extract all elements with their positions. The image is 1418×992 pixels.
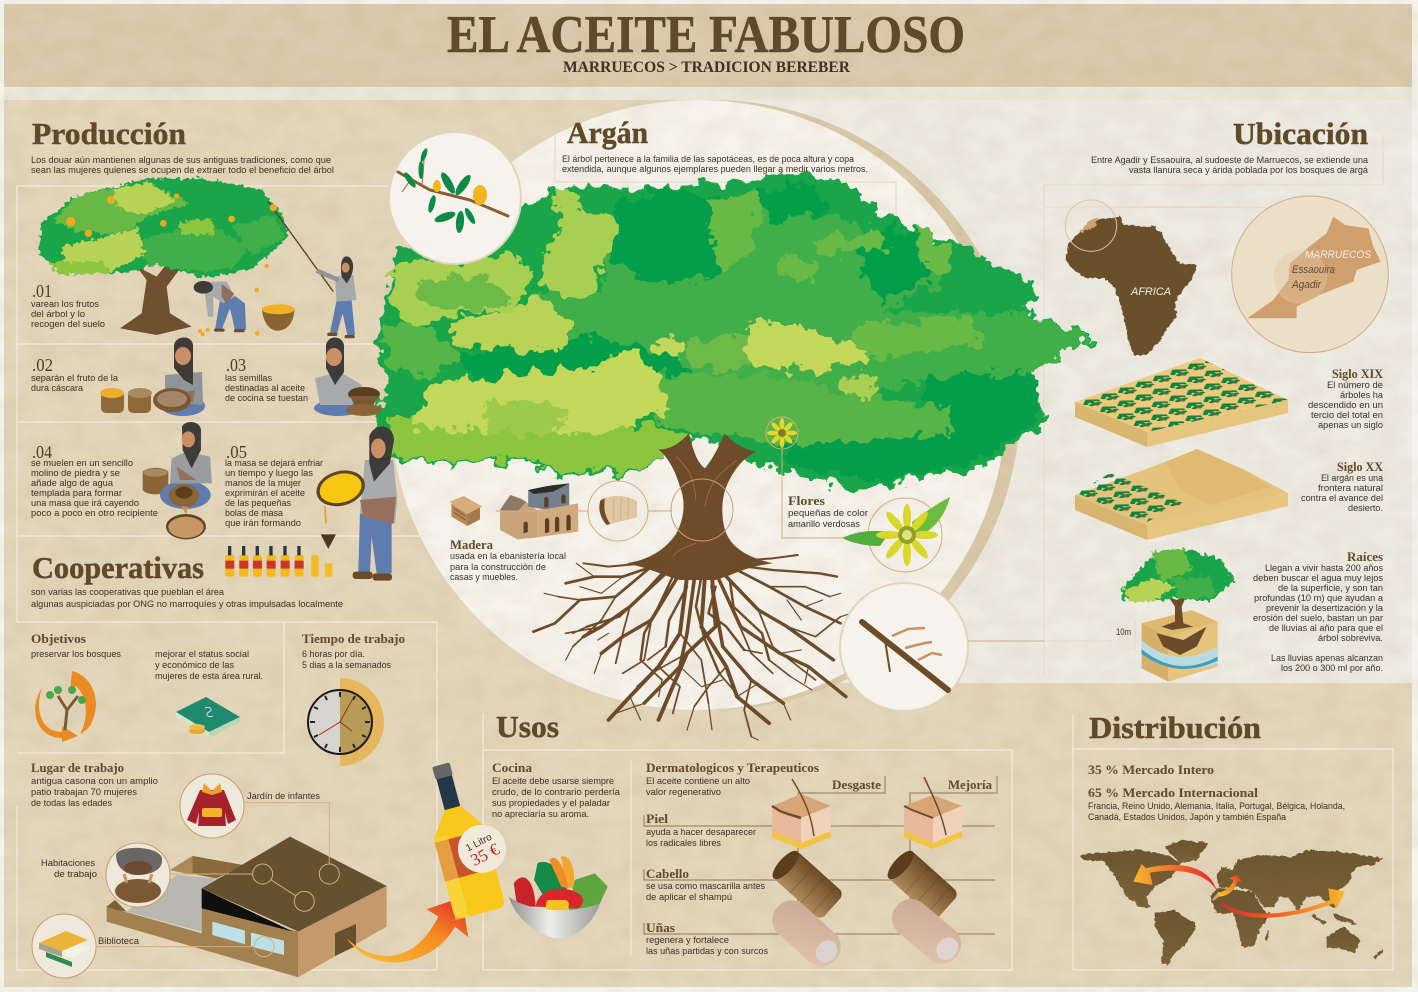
text: Siglo XX: frontera natural bbox=[1318, 483, 1383, 494]
icon: books in circle bbox=[32, 914, 96, 978]
panel: Ubicación bbox=[1045, 116, 1388, 682]
step 01 text: recogen del suelo bbox=[31, 319, 105, 330]
step 04 text: .04 bbox=[32, 442, 52, 462]
heading: Usos bbox=[496, 709, 559, 744]
row: Uñas: Uñas bbox=[646, 920, 675, 935]
label bbox=[450, 537, 566, 583]
text: Siglo XX: Siglo XX bbox=[1337, 459, 1384, 474]
title block bbox=[447, 6, 965, 76]
step 05 text: exprimirán el aceite bbox=[225, 488, 305, 499]
step 05 text: que irán formando bbox=[225, 518, 301, 529]
step 03 text: .03 bbox=[226, 355, 246, 375]
label: Habitaciones de trabajo: de trabajo bbox=[54, 869, 97, 880]
illustration: cooperative building bbox=[97, 803, 387, 977]
text: Siglo XIX: Siglo XIX bbox=[1332, 366, 1384, 381]
step 03 text: destinadas al aceite bbox=[225, 383, 305, 394]
label: casas y muebles. bbox=[450, 572, 518, 583]
subsection: dermatological uses text: Desgaste bbox=[832, 777, 881, 792]
callout: wood uses bbox=[450, 479, 733, 583]
step 03 text bbox=[225, 355, 308, 404]
subsection: Cocina text: sus propiedades y el paladar bbox=[492, 798, 611, 809]
map: world with export arrows bbox=[1080, 840, 1383, 965]
heading: Objetivos bbox=[31, 631, 86, 646]
map: Morocco bbox=[1232, 196, 1388, 353]
row: Cabello: de aplicar el shampú bbox=[646, 892, 732, 903]
step 03 text: las semillas bbox=[225, 373, 272, 384]
step 04 text: se muelen en un sencillo bbox=[31, 458, 133, 469]
subsection: Cocina text: crudo, de lo contrario perdería bbox=[492, 787, 621, 798]
text: mejorar el status social bbox=[155, 649, 249, 660]
illustration: harvest tree bbox=[120, 259, 192, 335]
heading: Argán bbox=[567, 115, 648, 150]
text bbox=[302, 649, 391, 671]
step 01 text bbox=[31, 281, 105, 330]
comparison table rules bbox=[644, 776, 997, 934]
icon: hair strand damaged bbox=[768, 847, 845, 920]
label: para la construcción de bbox=[450, 562, 546, 573]
icon: flower bbox=[842, 497, 950, 572]
panel: Cooperativas bbox=[31, 546, 343, 610]
text: Raíces: de la superficie, y son tan bbox=[1278, 583, 1383, 594]
intro text bbox=[31, 155, 334, 176]
panel: Distribución bbox=[1080, 710, 1383, 965]
text: mujeres de esta área rural. bbox=[155, 671, 263, 682]
text: Siglo XIX: El número de bbox=[1327, 380, 1383, 391]
text: Siglo XX: contra el avance del bbox=[1301, 493, 1383, 504]
label bbox=[788, 493, 869, 530]
panel: Producción bbox=[31, 116, 397, 581]
icon: oil bottle with price tag bbox=[416, 754, 521, 920]
callout: flowers bbox=[788, 493, 950, 572]
icon: furniture bbox=[450, 496, 482, 526]
illustration: step 03 woman roasting bbox=[314, 338, 382, 416]
intro text: vasta llanura seca y árida poblada por los bosques de argá bbox=[1129, 165, 1369, 176]
subsection: Cocina text: El aceite debe usarse siempre bbox=[492, 776, 614, 787]
step 02 text: dura cáscara bbox=[31, 383, 84, 394]
panel: Objetivos bbox=[31, 631, 263, 742]
text: 5 dias a la semanados bbox=[302, 660, 391, 671]
icon: woman's hands kneading in circle bbox=[106, 843, 170, 907]
row: Uñas: las uñas partidas y con surcos bbox=[646, 946, 768, 957]
panel: Lugar de trabajo bbox=[31, 760, 468, 978]
description: El árbol pertenece a la familia de las sapotáceas, es de poca altura y copa bbox=[562, 154, 855, 165]
map: Africa bbox=[1065, 200, 1267, 356]
icon: root in circle bbox=[840, 583, 1044, 711]
icon: banknotes and coins bbox=[176, 697, 240, 738]
label: Madera bbox=[450, 537, 493, 552]
step 05 text: de las pequeñas bbox=[225, 498, 291, 509]
description: extendida, aunque algunos ejemplares pueden llegar a medir varios metros. bbox=[562, 164, 868, 175]
icon: houses bbox=[500, 483, 578, 539]
step 04 text: poco a poco en otro recipiente bbox=[31, 508, 158, 519]
illustration: XX century desert plot bbox=[1075, 449, 1288, 540]
label: pequeñas de color bbox=[788, 508, 869, 519]
illustration: trunk and roots bbox=[534, 433, 851, 740]
price label: 1 Litro bbox=[464, 832, 494, 854]
illustration: tree with soil cross-section bbox=[1045, 550, 1233, 682]
map labels: Agadir bbox=[1291, 279, 1322, 291]
label: amarillo verdosas bbox=[788, 519, 860, 530]
map labels: MARRUECOS bbox=[1305, 249, 1372, 261]
icon: skin cube worn bbox=[772, 779, 831, 849]
text: Siglo XIX: árboles ha bbox=[1340, 390, 1384, 401]
intro text: Entre Agadir y Essaouira, al sudoeste de Marruecos, se extiende una bbox=[1091, 155, 1369, 166]
step 05 text: bolas de masa bbox=[225, 508, 284, 519]
row: Uñas: regenera y fortalece bbox=[646, 935, 729, 946]
step 04 text: molino de piedra y se bbox=[31, 468, 120, 479]
text: de todas las edades bbox=[31, 798, 112, 809]
illustration: XIX century grove plot bbox=[1075, 358, 1288, 447]
row: Uñas bbox=[646, 920, 768, 957]
country list: Canadá, Estados Unidos, Japón y también España bbox=[1088, 812, 1287, 823]
trunk bbox=[626, 433, 773, 580]
chart: clock bbox=[308, 678, 384, 766]
text bbox=[31, 649, 263, 682]
row: Piel bbox=[646, 811, 757, 849]
heading: Producción bbox=[32, 116, 186, 151]
country list: Francia, Reino Unido, Alemania, Italia, Portugal, Bélgica, Holanda, bbox=[1088, 801, 1345, 812]
step 04 text: templada para formar bbox=[31, 488, 123, 499]
label: Flores bbox=[788, 493, 825, 508]
heading: Cooperativas bbox=[32, 550, 204, 585]
step 03 text: de cocina se tuestan bbox=[225, 393, 308, 404]
map labels bbox=[1291, 249, 1372, 291]
label: 10m: 10m bbox=[1116, 627, 1131, 638]
row: Piel: los radicales libres bbox=[646, 838, 721, 849]
step 02 text: .02 bbox=[32, 355, 53, 375]
subsection: dermatological uses text: El aceite contiene un alto bbox=[646, 776, 750, 787]
map labels: Essaouira bbox=[1292, 264, 1335, 276]
row: Piel: ayuda a hacer desaparecer bbox=[646, 827, 757, 838]
icon: finger worn bbox=[765, 893, 848, 974]
step 01 text: del árbol y lo bbox=[31, 309, 85, 320]
row: Cabello: Cabello bbox=[646, 866, 689, 881]
text: Siglo XIX bbox=[1308, 366, 1384, 431]
icon: salad bowl bbox=[509, 856, 608, 938]
text: Raíces bbox=[1253, 549, 1384, 674]
arrow: from building to bottle bbox=[347, 897, 468, 962]
text: Siglo XX: desierto. bbox=[1348, 503, 1383, 514]
stat: international market: 65 % Mercado Internacional bbox=[1088, 785, 1258, 800]
row: Piel: Piel bbox=[646, 811, 668, 826]
foliage of harvest tree bbox=[40, 180, 287, 277]
panel: Usos bbox=[492, 709, 997, 974]
text: Raíces: Llegan a vivir hasta 200 años bbox=[1265, 563, 1383, 574]
subsection: dermatological uses text: Mejoría bbox=[948, 777, 992, 792]
subsection: dermatological uses text: valor regenerativo bbox=[646, 787, 721, 798]
step 04 text: añade algo de agua bbox=[31, 478, 114, 489]
text: Siglo XX bbox=[1301, 459, 1384, 514]
title: EL ACEITE FABULOSO bbox=[447, 6, 965, 64]
step 05 text: un tiempo y luego las bbox=[225, 468, 313, 479]
heading: Tiempo de trabajo bbox=[302, 631, 405, 646]
text: Raíces: deben buscar el agua muy lejos bbox=[1253, 573, 1383, 584]
text: y económico de las bbox=[155, 660, 234, 671]
stat: domestic market: 35 % Mercado Intero bbox=[1088, 762, 1214, 777]
subsection: dermatological uses text bbox=[646, 760, 992, 798]
heading: Distribución bbox=[1089, 710, 1261, 745]
text: antigua casona con un amplio bbox=[31, 776, 158, 787]
step 04 text bbox=[31, 442, 158, 519]
text: patio trabajan 70 mujeres bbox=[31, 787, 137, 798]
person bending bbox=[194, 281, 246, 332]
illustration: step 04 woman grinding bbox=[143, 422, 212, 539]
illustration: step 02 woman and bowls bbox=[100, 338, 205, 416]
price label bbox=[463, 831, 503, 870]
illustration: large argan tree canopy bbox=[380, 178, 1087, 488]
step 02 text bbox=[31, 355, 119, 394]
step 05 text: .05 bbox=[226, 442, 247, 462]
text: Siglo XIX: tercio del total en bbox=[1311, 410, 1383, 421]
text: Raíces: Las lluvias apenas alcanzan bbox=[1271, 653, 1383, 664]
icon: oil bottles row bbox=[225, 546, 332, 577]
main roots bbox=[534, 555, 851, 740]
illustration: step 05 woman pouring oil bbox=[312, 426, 397, 581]
text: son varias las cooperativas que pueblan el área bbox=[31, 587, 225, 598]
intro text: Los douar aún mantienen algunas de sus antiguas tradiciones, como que bbox=[31, 155, 331, 166]
icon: forest preservation cycle bbox=[35, 671, 96, 742]
step 04 text: una masa que irá cayendo bbox=[31, 498, 139, 509]
trunk highlights bbox=[673, 457, 737, 557]
subtitle: MARRUECOS > TRADICION BEREBER bbox=[563, 59, 850, 76]
small flower callout on tree bbox=[766, 417, 870, 538]
icon: argan branch in circle bbox=[389, 132, 521, 264]
subsection: Cocina text: Cocina bbox=[492, 760, 533, 775]
text bbox=[31, 776, 158, 809]
subsection: Cocina text bbox=[492, 760, 621, 820]
intro text bbox=[1091, 155, 1369, 176]
person with pole bbox=[317, 256, 357, 338]
intro text: sean las mujeres quienes se ocupen de extraer todo el beneficio del árbol bbox=[31, 165, 334, 176]
label: Biblioteca: Biblioteca bbox=[98, 936, 140, 947]
row: Cabello: se usa como mascarilla antes bbox=[646, 881, 765, 892]
text: Raíces: Raíces bbox=[1347, 549, 1383, 564]
label: Habitaciones de trabajo bbox=[41, 858, 97, 880]
row: Cabello bbox=[646, 866, 765, 903]
text: Raíces: árbol sobreviva. bbox=[1318, 633, 1383, 644]
fruit and pole bbox=[66, 193, 357, 338]
text bbox=[31, 587, 343, 610]
label: AFRICA: AFRICA bbox=[1130, 286, 1171, 298]
text: Raíces: erosión del suelo, bastan un par bbox=[1253, 613, 1384, 624]
icon: hair strand repaired bbox=[883, 847, 960, 920]
price label: 35 € bbox=[467, 839, 503, 870]
label: Habitaciones de trabajo: Habitaciones bbox=[41, 858, 95, 869]
step 01 text: varean los frutos bbox=[31, 299, 99, 310]
step 05 text: la masa se dejará enfriar bbox=[225, 458, 324, 469]
panel: Argán header text bbox=[562, 115, 868, 175]
step 05 text: manos de la mujer bbox=[225, 478, 302, 489]
description bbox=[562, 154, 868, 175]
text: Raíces: profundas (10 m) que ayudan a bbox=[1254, 593, 1384, 604]
text: Raíces: prevenir la desertización y la bbox=[1266, 603, 1384, 614]
text: 6 horas por día. bbox=[302, 649, 365, 660]
country list bbox=[1088, 801, 1345, 823]
subsection: Cocina text: no apreciaría su aroma. bbox=[492, 809, 589, 820]
icon: skin cube improved bbox=[904, 777, 962, 849]
label: usada en la ebanistería local bbox=[450, 551, 566, 562]
icon: wood cross-section bbox=[588, 481, 648, 541]
step 02 text: separán el fruto de la bbox=[31, 373, 119, 384]
icon: finger improved bbox=[884, 892, 969, 971]
panel: Tiempo de trabajo bbox=[302, 631, 405, 766]
subsection: dermatological uses text: Dermatologicos y Terapeuticos bbox=[646, 760, 819, 775]
text: Siglo XIX: descendido en un bbox=[1308, 400, 1383, 411]
basket bbox=[262, 304, 295, 331]
heading: Ubicación bbox=[1233, 116, 1368, 151]
label: Jardín de infantes: Jardín de infantes bbox=[247, 791, 320, 802]
text: algunas auspiciadas por ONG no marroquíes y otras impulsadas localmente bbox=[31, 599, 343, 610]
step 05 text bbox=[225, 442, 324, 529]
text: Siglo XIX: apenas un siglo bbox=[1318, 420, 1383, 431]
icon: child's smock in circle bbox=[180, 774, 244, 838]
text: preservar los bosques bbox=[31, 649, 121, 660]
step 01 text: .01 bbox=[32, 281, 52, 301]
heading: Lugar de trabajo bbox=[31, 760, 124, 775]
text: Raíces: de lluvias al año para que el bbox=[1269, 623, 1383, 634]
text: Raíces: los 200 o 300 ml por año. bbox=[1281, 663, 1383, 674]
text: Siglo XX: El argán es una bbox=[1321, 473, 1384, 484]
